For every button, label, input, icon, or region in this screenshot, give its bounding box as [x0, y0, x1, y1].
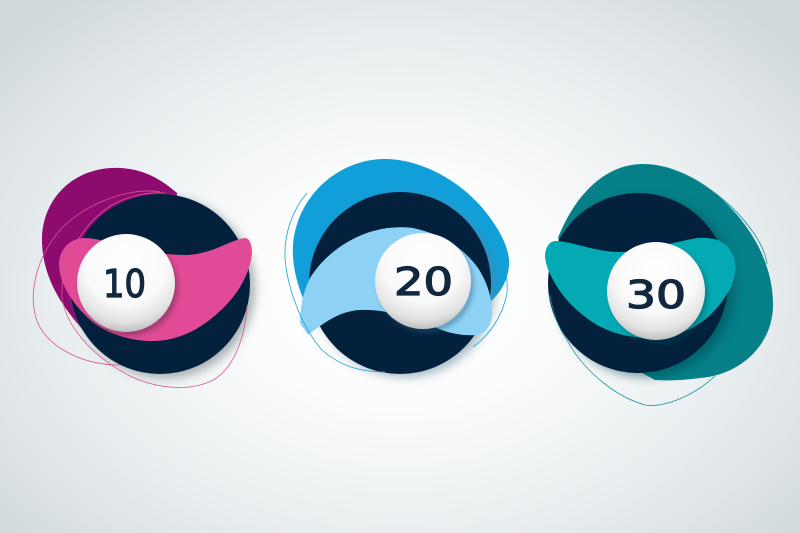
diagram: 10 — [33, 168, 255, 387]
ball shadow — [378, 237, 474, 333]
navy circle — [70, 194, 250, 374]
teal outline loop — [550, 170, 767, 405]
circle shadow — [75, 198, 255, 378]
circle shadow — [315, 197, 495, 377]
white ball — [375, 233, 471, 329]
blob: dark teal back shape — [558, 164, 773, 380]
number 30: 30 — [626, 273, 686, 317]
pink outline loops — [33, 191, 247, 387]
blob: blue back shape — [293, 159, 509, 320]
pink wave shape — [59, 238, 252, 341]
blob: purple back shape — [42, 168, 177, 332]
diagram: 30 — [545, 164, 773, 405]
circle shadow — [555, 197, 735, 377]
white ball — [607, 242, 705, 340]
blue outline loop — [285, 193, 507, 372]
light teal wave shape — [545, 238, 736, 338]
ball shadow — [80, 238, 178, 336]
diagram: 20 — [285, 159, 509, 377]
number 20: 20 — [394, 260, 453, 304]
navy circle — [309, 192, 491, 374]
ball shadow — [610, 246, 708, 344]
navy circle — [548, 193, 728, 373]
number 10: 10 — [103, 262, 146, 306]
white ball — [77, 234, 175, 332]
light blue wave shape — [300, 227, 492, 335]
